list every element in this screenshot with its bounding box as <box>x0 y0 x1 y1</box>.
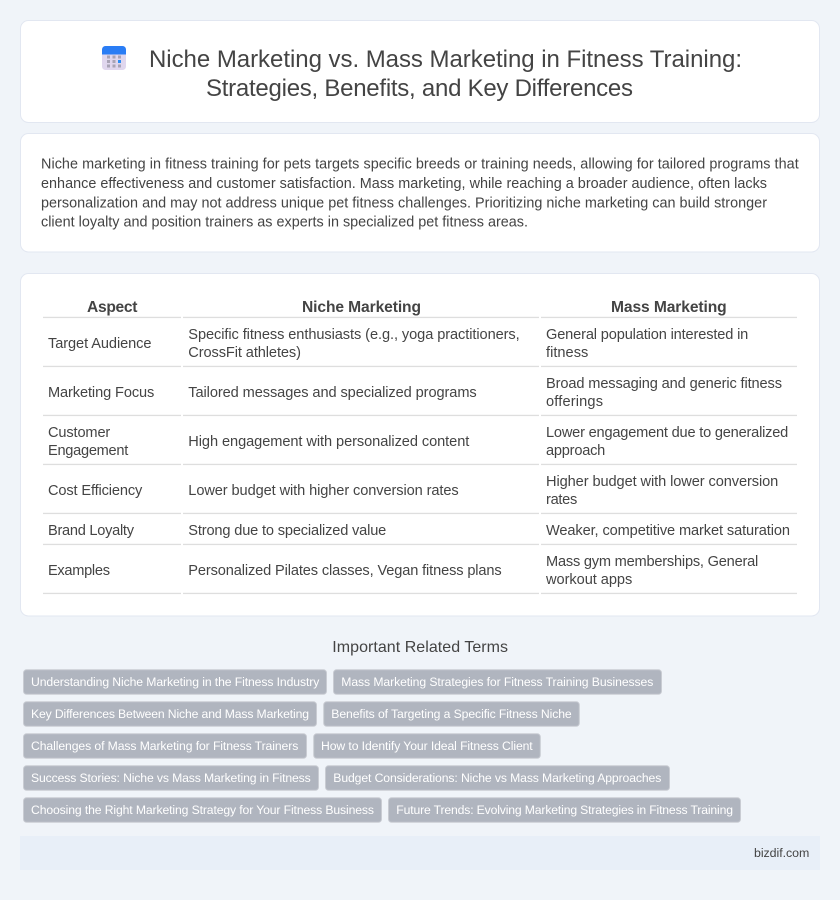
tag: Key Differences Between Niche and Mass Marketing <box>31 707 309 721</box>
description text: enhance effectiveness and customer satisfaction. Mass marketing, while reaching a broader audience, often lacks <box>41 176 767 192</box>
table header: Niche Marketing <box>302 299 421 316</box>
description text: personalization and may not address unique pet fitness challenges. Prioritizing niche marketing can build stronger <box>41 196 767 212</box>
tag: Understanding Niche Marketing in the Fitness Industry <box>31 675 320 689</box>
description text: client loyalty and position trainers as experts in specialized pet fitness areas. <box>41 215 528 231</box>
row: customer engagement: Customer <box>48 425 110 441</box>
row: examples <box>48 554 758 588</box>
title <box>149 46 742 102</box>
related terms tags <box>24 670 740 822</box>
tag <box>24 798 382 822</box>
tag <box>334 670 662 694</box>
tag <box>24 766 318 790</box>
row: brand loyalty: Brand Loyalty <box>48 523 135 539</box>
tag: Mass Marketing Strategies for Fitness Training Businesses <box>341 675 653 689</box>
title: Niche Marketing vs. Mass Marketing in Fitness Training: <box>149 46 742 73</box>
tag <box>388 798 740 822</box>
row: examples: Examples <box>48 563 110 579</box>
tag <box>24 734 306 758</box>
table header: Aspect <box>87 299 138 316</box>
tag: Choosing the Right Marketing Strategy for Your Fitness Business <box>31 803 374 817</box>
panel: comparison table <box>20 274 820 616</box>
tag <box>314 734 540 758</box>
footer <box>20 836 820 870</box>
row: target audience: Specific fitness enthusiasts (e.g., yoga practitioners, <box>188 327 520 343</box>
row: cost efficiency <box>48 474 778 508</box>
row: customer engagement: High engagement with personalized content <box>188 434 469 450</box>
table header: Mass Marketing <box>611 299 727 316</box>
title: Strategies, Benefits, and Key Differences <box>206 75 633 102</box>
table header <box>87 299 727 316</box>
row: customer engagement: Engagement <box>48 443 128 459</box>
row: cost efficiency: rates <box>546 492 577 508</box>
row: marketing focus <box>48 376 782 410</box>
tag: Success Stories: Niche vs Mass Marketing in Fitness <box>31 771 311 785</box>
tag <box>324 702 579 726</box>
panel: description <box>20 134 820 252</box>
row: target audience: Target Audience <box>48 336 152 352</box>
panel: title card <box>20 20 820 122</box>
row: brand loyalty <box>48 523 790 539</box>
row: examples: Mass gym memberships, General <box>546 554 758 570</box>
tag: Challenges of Mass Marketing for Fitness Trainers <box>31 739 298 753</box>
row: marketing focus: Marketing Focus <box>48 385 154 401</box>
footer: bizdif.com <box>754 846 809 860</box>
tag <box>24 702 316 726</box>
row: brand loyalty: Weaker, competitive market saturation <box>546 523 790 539</box>
row: cost efficiency: Lower budget with higher conversion rates <box>188 483 459 499</box>
row: customer engagement: approach <box>546 443 605 459</box>
icon: calendar <box>102 46 126 70</box>
row: brand loyalty: Strong due to specialized value <box>188 523 386 539</box>
tag: Budget Considerations: Niche vs Mass Marketing Approaches <box>333 771 661 785</box>
row: target audience: fitness <box>546 345 588 361</box>
row: marketing focus: offerings <box>546 394 603 410</box>
row: customer engagement: Lower engagement due to generalized <box>546 425 788 441</box>
row: marketing focus: Tailored messages and specialized programs <box>188 385 477 401</box>
description text: Niche marketing in fitness training for pets targets specific breeds or training needs, allowing for tailored programs that <box>41 157 799 173</box>
tag: How to Identify Your Ideal Fitness Client <box>321 739 533 753</box>
description text <box>41 157 799 231</box>
row: cost efficiency: Higher budget with lower conversion <box>546 474 778 490</box>
row: cost efficiency: Cost Efficiency <box>48 483 143 499</box>
row: customer engagement <box>48 425 788 459</box>
row: examples: workout apps <box>545 572 632 588</box>
tag <box>326 766 670 790</box>
tag: Future Trends: Evolving Marketing Strategies in Fitness Training <box>396 803 733 817</box>
heading: important related terms: Important Related Terms <box>332 639 508 656</box>
row: target audience: General population interested in <box>546 327 748 343</box>
row: target audience <box>48 327 748 361</box>
tag <box>24 670 326 694</box>
row: examples: Personalized Pilates classes, Vegan fitness plans <box>188 563 502 579</box>
row: target audience: CrossFit athletes) <box>188 345 301 361</box>
tag: Benefits of Targeting a Specific Fitness Niche <box>331 707 572 721</box>
row: marketing focus: Broad messaging and generic fitness <box>546 376 782 392</box>
